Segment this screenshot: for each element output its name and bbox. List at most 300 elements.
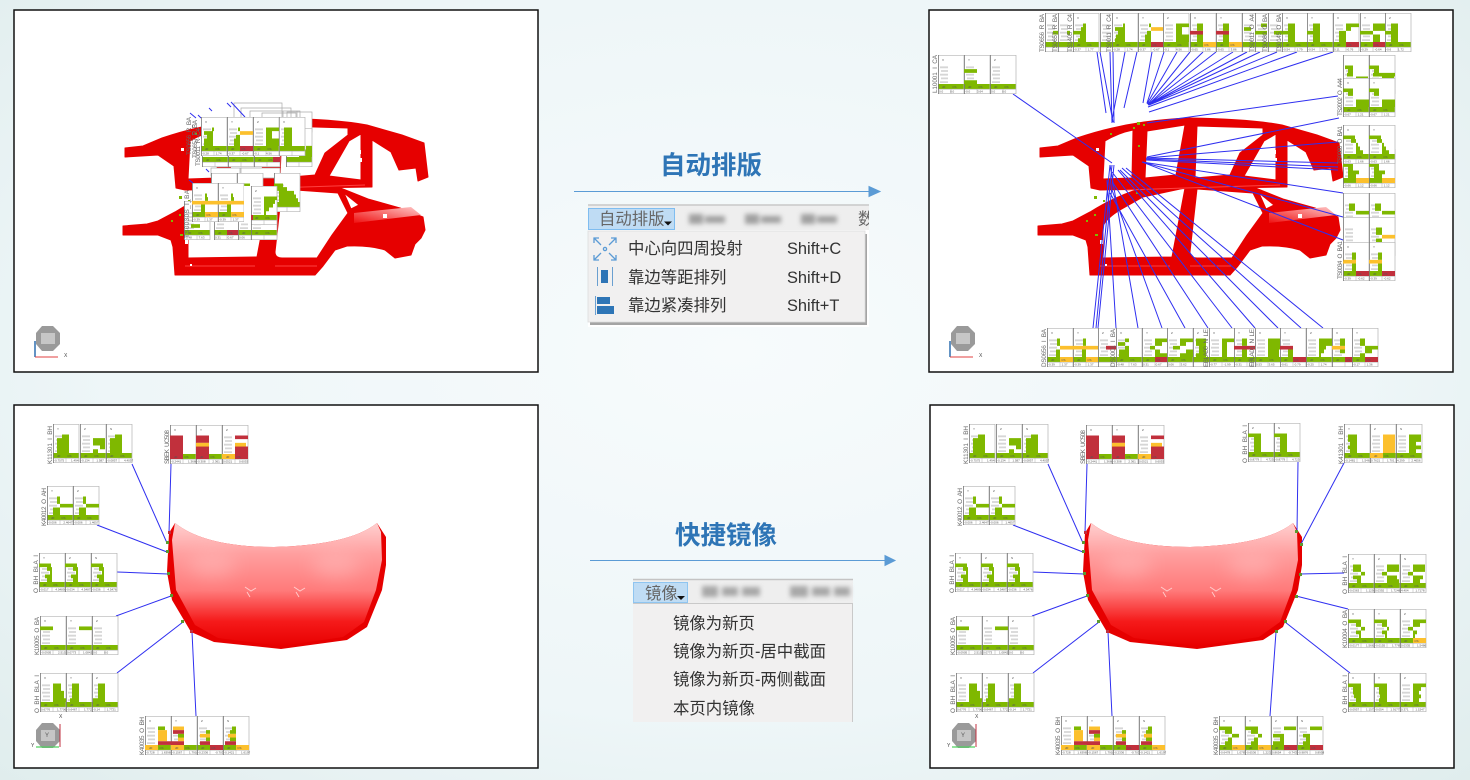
stacked mini charts: before layout lower: dF CS: [188, 231, 203, 235]
stacked mini charts: before layout upper: dF CS: [258, 158, 273, 162]
mini charts: bottom row: DS0656_I_BA: [1041, 328, 1048, 367]
stacked mini charts: before layout upper: dF CS: [231, 147, 246, 151]
mini charts: top row: TS0011_O_A4: [1249, 14, 1256, 52]
stacked mini charts: before layout upper: dF CS: [206, 158, 221, 162]
mini charts: top row: TS0657_R_BA: [1052, 13, 1059, 52]
mini chart: left: [932, 54, 1016, 94]
view cube: after layout: [950, 326, 983, 359]
mini charts: bottom row: -0.25 1.74: [1307, 362, 1327, 366]
mini charts: right column: TS2002_O_A44: [1337, 78, 1344, 116]
mini charts: top row: -0.37 1.77: [1074, 48, 1094, 52]
mini chart: SBEK_UC508: -0.308 2.361: [197, 460, 220, 464]
mini chart: O_BH_BLA_I lower: dF CS: [44, 703, 59, 707]
mini charts: bottom row: Z: [1102, 331, 1104, 335]
mini charts: bottom row: EBLA01_N_LE: [1249, 329, 1256, 367]
stacked mini charts: before layout lower: dF CS: [196, 213, 211, 217]
mini chart: SBEK_UC508: Z: [226, 428, 228, 432]
mini chart: O_BH_BLA_I right top: dF CS: [1252, 453, 1267, 457]
mini charts: top row: X: [1077, 16, 1079, 20]
mini chart: left: Z: [994, 58, 996, 62]
mini chart: K41301_I_BH right: [1338, 424, 1422, 464]
mini chart: K40035_O_BH: -0.2336 -0.7036: [198, 750, 226, 754]
mini chart: O_BH_BLA_I right top: N: [1278, 426, 1280, 430]
mini chart: K40035_O_BH right: [1213, 716, 1325, 755]
mini chart: K10004_O_BA right: Y: [1378, 612, 1380, 616]
menu: quick mirror: [633, 579, 853, 722]
mini chart: K40035_O_BH right: K40035_O_BH: [1213, 717, 1220, 755]
mini chart: O_BH_BLA_I lower: 0.6776 1.7706: [41, 708, 67, 712]
stacked mini charts: before layout upper: dF CS: [257, 147, 272, 151]
mini charts: bottom row: Y: [1284, 331, 1286, 335]
mini charts: top row: -0.54 1.79: [1283, 48, 1303, 52]
mini chart: O_BH_BLA_I upper: -0.034 4.5487: [66, 588, 91, 592]
mini chart: K41301_I_BH right: Z: [1374, 427, 1376, 431]
mini charts: bottom row: -0.17 1.36: [1353, 362, 1373, 366]
stacked mini charts: before layout lower: dF CS: [255, 216, 270, 220]
mini chart: O_BH_BLA_I right middle: O_BH_BLA_I: [1342, 556, 1349, 594]
mini chart: O_BH_BLA_I upper: Z: [69, 556, 71, 560]
mini chart: K41301_I_BH right: dF CS: [1374, 454, 1389, 458]
mini chart: O_BH_BLA_I right middle: dF CS: [1378, 584, 1393, 588]
mini chart: K41301_I_BH right: N: [1400, 427, 1402, 431]
mini charts: bottom row: -0.39 1.37: [1074, 362, 1094, 366]
mini charts: top row: dF CS: [1142, 43, 1157, 47]
mini charts: top row: dF CS: [1167, 43, 1182, 47]
mini chart: O_BH_BLA_I right bottom: -0.0957 1.1571: [1349, 708, 1376, 712]
mini chart: O_BH_BLA_I lower: dF CS: [70, 703, 85, 707]
stacked mini charts: before layout lower: dF CS: [242, 231, 257, 235]
mini charts: bottom row: dF CS: [1259, 358, 1274, 362]
toolbar button: quick mirror: 镜像: [645, 584, 678, 603]
mini charts: bottom row: X: [1213, 331, 1215, 335]
mini charts: top row: X: [1337, 16, 1339, 20]
mini charts: bottom row: X: [1336, 331, 1338, 335]
mini charts: top row: Y: [1142, 16, 1144, 20]
menu item: 靠边紧凑排列: [628, 297, 839, 315]
mini chart: K40012_O_AH: Y: [51, 489, 53, 493]
mini chart: K11301_I_BH: K11301_I_BH: [47, 426, 54, 464]
mini chart: O_BH_BLA_I upper: -0.036 4.5476: [92, 588, 117, 592]
view cube: mirror before: X: [59, 714, 63, 720]
stacked mini charts: before layout lower: X: [196, 186, 198, 190]
mini chart: O_BH_BLA_I lower: [34, 673, 118, 713]
blurred toolbar items: [702, 586, 850, 597]
mini charts: right column: -0.39 -0.62: [1370, 276, 1391, 280]
mini chart: O_BH_BLA_I right top: [1242, 423, 1300, 463]
leader lines: after layout: [1013, 52, 1343, 328]
mini chart: O_BH_BLA_I right middle: Z: [1378, 557, 1380, 561]
toolbar button: auto layout: 自动排版: [599, 210, 665, 228]
mini chart: K10005_O_BA: dF CS: [44, 646, 59, 650]
mini chart: O_BH_BLA_I upper: O_BH_BLA_I: [33, 555, 40, 593]
mini charts: bottom row: X: [1120, 331, 1122, 335]
mini chart: K40035_O_BH: dF CS: [201, 746, 216, 750]
mini charts: top row: Y: [1311, 16, 1313, 20]
mini chart: K40012_O_AH: dF CS: [51, 516, 66, 520]
mini charts: top row: -0.65 3.86: [1191, 48, 1211, 52]
mini charts: right column: X: [1347, 81, 1349, 85]
mini charts: right column: Y: [1373, 81, 1375, 85]
stacked mini charts: before layout upper: X: [205, 120, 207, 124]
mini charts: top row: TS0656_R_BA: [1039, 13, 1046, 52]
mini chart: K10005_O_BA: dF CS: [96, 646, 111, 650]
mini chart: O_BH_BLA_I right bottom: 0.371 1.1547: [1401, 708, 1425, 712]
mini charts: top row: dF CS: [1194, 43, 1209, 47]
mini chart: K11301_I_BH: dF CS: [57, 454, 72, 458]
mini charts: bottom row: dF CS: [1146, 358, 1161, 362]
mini chart: SBEK_UC508: Y: [200, 428, 202, 432]
mini chart: K10004_O_BA right: dF CS: [1352, 639, 1367, 643]
mini charts: right column: -0.63 1.66: [1370, 160, 1390, 164]
mini charts: bottom row: X: [1259, 331, 1261, 335]
mini chart: left: 0.0 0.0: [939, 90, 955, 94]
mini charts: top row: Z: [1167, 16, 1169, 20]
stacked mini charts: before layout lower: [184, 168, 300, 240]
stacked mini charts: before layout upper: TS0656_R_BA: [186, 116, 193, 155]
stacked mini charts: before layout lower: dF CS: [218, 231, 233, 235]
mini chart: O_BH_BLA_I right top: -0.8779 4.725: [1249, 458, 1274, 462]
mini charts: bottom row: 0.31 0.67: [1143, 362, 1162, 366]
mini charts: bottom row: -0.31 1.2: [1235, 362, 1253, 366]
mini charts: bottom row: dF CS: [1120, 358, 1135, 362]
stacked mini charts: before layout upper: TS0657_R_BA: [192, 119, 199, 158]
mini chart: O_BH_BLA_I right top: Z: [1252, 426, 1254, 430]
mini chart: O_BH_BLA_I lower: Y: [70, 676, 72, 680]
mini chart: O_BH_BLA_I lower: O_BH_BLA_I: [34, 675, 41, 713]
mirrored left charts: mirror after: [949, 424, 1167, 755]
mini charts: bottom row: dF CS: [1077, 358, 1092, 362]
mini charts: bottom row: dF CS: [1171, 358, 1186, 362]
mini charts: top row: -0.37 -0.67: [1139, 48, 1160, 52]
mini chart: O_BH_BLA_I upper: Y: [43, 556, 45, 560]
mini chart: K40035_O_BH right: dF CS: [1301, 746, 1316, 750]
mini charts: top row: 0.11 -0.76: [1334, 48, 1354, 52]
mini charts: right column: -0.66 1.12: [1370, 184, 1390, 188]
mini charts: bottom row: DS0001_I_BA: [1110, 328, 1117, 367]
mini chart: O_BH_BLA_I right middle: N: [1404, 557, 1406, 561]
stacked mini charts: before layout lower: dF CS: [222, 213, 237, 217]
mini chart: SBEK_UC508: SBEK_UC508: [164, 430, 171, 464]
mini charts: bottom row: Y: [1146, 331, 1148, 335]
mini charts: right column: X: [1347, 245, 1349, 249]
mini chart: K10004_O_BA right: -0.0177 1.5662: [1349, 644, 1376, 648]
mini chart: K40012_O_AH: K40012_O_AH: [41, 488, 48, 526]
mini chart: K40035_O_BH: dF CS: [175, 746, 190, 750]
mini charts: bottom row: dF CS: [1213, 358, 1228, 362]
mini charts: top row: -0.1 4.56: [1164, 48, 1182, 52]
mini chart: K40035_O_BH right: dF CS: [1275, 746, 1290, 750]
mini chart: K40035_O_BH right: dF CS: [1249, 746, 1264, 750]
menu item: 中心向四周投射: Shift+C: [787, 240, 841, 258]
mini chart: K11301_I_BH: dF CS: [84, 454, 99, 458]
mini charts: bottom row: dF CS: [1051, 358, 1066, 362]
mini charts: top row: [1039, 13, 1411, 52]
panel: auto layout before: [14, 10, 538, 372]
car body: after layout: [1038, 118, 1343, 275]
mini chart: O_BH_BLA_I right bottom: dF CS: [1352, 703, 1367, 707]
mini charts: top row: dF CS: [1077, 43, 1092, 47]
mini chart: K41301_I_BH right: 4.299 2.4656: [1397, 458, 1421, 462]
mini charts: bottom row: [1041, 328, 1378, 367]
blurred toolbar items: [689, 214, 837, 224]
mini chart: K11301_I_BH: N: [110, 427, 112, 431]
mini chart: K40035_O_BH: Z: [201, 719, 203, 723]
mini charts: bottom row: 0.06 3.62: [1168, 362, 1187, 366]
mini chart: K11301_I_BH: -0.134 1.587: [81, 458, 104, 462]
mini charts: bottom row: X: [1051, 331, 1053, 335]
mini chart: O_BH_BLA_I right bottom: Y: [1378, 676, 1380, 680]
mini chart: K10005_O_BA: -0.0905 2.5151: [41, 650, 68, 654]
mini chart: K11301_I_BH: -0.0857 4.4057: [107, 458, 134, 462]
mini chart: O_BH_BLA_I right bottom: dF CS: [1378, 703, 1393, 707]
icon: center projection: [594, 238, 616, 260]
mini chart: O_BH_BLA_I upper: -0.017 4.0489: [40, 588, 65, 592]
mini chart: K10005_O_BA: 0.0 0.0: [93, 650, 109, 654]
mini charts: right column: dF CS: [1347, 272, 1362, 276]
mini charts: bottom row: Y: [1356, 331, 1358, 335]
mini charts: right column: TS0080_O_BA1: [1337, 126, 1344, 164]
view cube: mirror after: X: [975, 714, 979, 720]
mini chart: K10005_O_BA: [34, 616, 118, 655]
menu item: 靠边等距排列: 靠边等距排列: [628, 269, 726, 287]
hood: mirror after: [1083, 523, 1302, 649]
mini charts: top row: TS0145_O_BA: [1276, 13, 1283, 52]
mini charts: right column: TS0034_O_BA1: [1337, 241, 1344, 279]
mini chart: SBEK_UC508: dF CS: [226, 455, 241, 459]
mini chart: left: X: [942, 58, 944, 62]
mini charts: top row: TS0080_O_BA: [1262, 13, 1269, 52]
mini charts: bottom row: EBLA00_N_LE: [1203, 329, 1210, 367]
mini chart: K40035_O_BH right: -0.6536 1.2232: [1246, 750, 1273, 754]
view cube: mirror after: [947, 714, 979, 749]
arrow: quick mirror: [590, 556, 895, 566]
stacked mini charts: before layout lower: -0.48 7.63: [185, 236, 205, 240]
stacked mini charts: before layout upper: Y: [231, 120, 233, 124]
mini chart: K40035_O_BH right: 0.8654 -0.7437: [1272, 750, 1299, 754]
menu item: 靠边等距排列: Shift+D: [787, 269, 841, 287]
mini chart: K10004_O_BA right: K10004_O_BA: [1342, 609, 1349, 648]
view cube: before layout: [35, 326, 68, 359]
mini chart: K10005_O_BA: X: [44, 619, 46, 623]
mini charts: bottom row: Y: [1077, 331, 1079, 335]
mini chart: O_BH_BLA_I right middle: Y: [1352, 557, 1354, 561]
mini chart: left: 0.0 0.0: [991, 90, 1007, 94]
mini chart: O_BH_BLA_I upper: dF CS: [95, 583, 110, 587]
menu item: 靠边紧凑排列: Shift+T: [787, 297, 839, 315]
mini charts: bottom row: Z: [1310, 331, 1312, 335]
mini charts: top row: -0.54 1.79: [1308, 48, 1328, 52]
leader lines and mini charts: mirror before: [33, 424, 251, 755]
mini chart: O_BH_BLA_I lower: Z: [96, 676, 98, 680]
toolbar button: quick mirror: [634, 582, 688, 603]
arrow: auto layout: [574, 186, 880, 196]
mini chart: O_BH_BLA_I right bottom: X: [1352, 676, 1354, 680]
mini charts: bottom row: dF CS: [1336, 358, 1351, 362]
mini chart: SBEK_UC508: X: [174, 428, 176, 432]
mini chart: O_BH_BLA_I right bottom: dF CS: [1404, 703, 1419, 707]
mini chart: O_BH_BLA_I right top: dF CS: [1278, 453, 1293, 457]
mini charts: bottom row: dF CS: [1356, 358, 1371, 362]
mini chart: O_BH_BLA_I upper: dF CS: [69, 583, 84, 587]
mini chart: O_BH_BLA_I right bottom: Z: [1404, 676, 1406, 680]
view cube: mirror after: Y: [961, 733, 965, 739]
mini charts: top row: X: [1286, 16, 1288, 20]
mini chart: O_BH_BLA_I right middle: dF CS: [1352, 584, 1367, 588]
mini charts: top row: Y: [1364, 16, 1366, 20]
mini charts: top row: Y: [1220, 16, 1222, 20]
menu item: 本页内镜像: 本页内镜像: [673, 699, 755, 718]
mini chart: K41301_I_BH right: Y: [1348, 427, 1350, 431]
mini charts: top row: X: [1194, 16, 1196, 20]
stacked mini charts: before layout upper: Z: [257, 120, 259, 124]
mini chart: left: -0.0 3.64: [965, 90, 983, 94]
mini chart: left: dF CS: [994, 85, 1009, 89]
mini chart: K10004_O_BA right: -0.0155 1.7787: [1375, 644, 1402, 648]
mini chart: O_BH_BLA_I upper: dF CS: [43, 583, 58, 587]
mini charts: top row: dF CS: [1337, 43, 1352, 47]
mini charts: right column: X: [1347, 128, 1349, 132]
stacked mini charts: before layout lower: 0.06 3.62: [239, 236, 258, 240]
mini chart: O_BH_BLA_I lower: -0.6467 1.7721: [67, 708, 94, 712]
mini chart: K40035_O_BH: dF CS: [227, 746, 242, 750]
mini charts: right column: dF CS: [1347, 108, 1362, 112]
mini chart: K10005_O_BA: K10005_O_BA: [34, 616, 41, 655]
mini chart: K10004_O_BA right: Z: [1404, 612, 1406, 616]
mini chart: K41301_I_BH right: 0.7621 1.701: [1371, 458, 1395, 462]
mini chart: O_BH_BLA_I right bottom: O_BH_BLA_I: [1342, 675, 1349, 713]
mini chart: K40012_O_AH: [41, 486, 99, 526]
mini chart: K40012_O_AH: -0.006 2.4647: [48, 520, 73, 524]
mini chart: O_BH_BLA_I lower: X: [44, 676, 46, 680]
mini chart: K10004_O_BA right: X: [1352, 612, 1354, 616]
mini chart: K40035_O_BH: X: [149, 719, 151, 723]
mini chart: SBEK_UC508: dF CS: [200, 455, 215, 459]
menu item: 靠边紧凑排列: 靠边紧凑排列: [628, 297, 726, 315]
stacked mini charts: before layout lower: 0.31 0.67: [215, 236, 234, 240]
stacked mini charts: before layout upper: TS0011_R_C4: [195, 128, 202, 166]
mini chart: K41301_I_BH right: K41301_I_BH: [1338, 426, 1345, 464]
mini charts: top row: -0.29 -0.64: [1361, 48, 1382, 52]
mini charts: top row: dF CS: [1286, 43, 1301, 47]
mini chart: K40012_O_AH: -0.006 1.4657: [74, 520, 99, 524]
mini chart: K40035_O_BH: -0.728 1.6398: [146, 750, 171, 754]
stacked mini charts: before layout lower: Z: [255, 189, 257, 193]
mini charts: top row: TS1405_R_C4: [1067, 14, 1074, 52]
mini charts: top row: -0.65 3.86: [1217, 48, 1237, 52]
mini chart: K41301_I_BH right: dF CS: [1348, 454, 1363, 458]
view cube: mirror before: Y: [31, 743, 35, 749]
stacked mini charts: before layout lower: TS0030S_I_BA: [184, 189, 191, 238]
mini charts: right column: [1337, 55, 1395, 281]
mini chart: left: dF CS: [968, 85, 983, 89]
mini charts: bottom row: Z: [1197, 331, 1199, 335]
mini chart: K10005_O_BA: 0.0773 1.0842: [67, 650, 93, 654]
mini chart: K40035_O_BH right: X: [1223, 719, 1225, 723]
mini chart: SBEK_UC508: -0.2441 1.3660: [171, 460, 198, 464]
menu item: 镜像为新页-两侧截面: 镜像为新页-两侧截面: [673, 670, 826, 689]
mini charts: top row: TS0011_R_C4: [1106, 14, 1113, 52]
mini chart: O_BH_BLA_I right bottom: -0.054 1.9177: [1375, 708, 1400, 712]
mini chart: K10005_O_BA: Z: [96, 619, 98, 623]
mini charts: bottom row: -0.48 7.63: [1117, 362, 1137, 366]
mini chart: K40035_O_BH right: -0.9876 0.8958: [1298, 750, 1325, 754]
mini chart: O_BH_BLA_I right top: -0.8779 4.725: [1275, 458, 1300, 462]
mini chart: O_BH_BLA_I right middle: 0.0392 1.7248: [1375, 588, 1401, 592]
hood: mirror before: [167, 523, 386, 649]
view cube: mirror after: Y: [947, 743, 951, 749]
icon: compact spacing: [595, 296, 614, 315]
mini charts: right column: -0.66 1.12: [1344, 184, 1364, 188]
menu item: 镜像为新页: 镜像为新页: [673, 614, 755, 633]
mini chart: O_BH_BLA_I upper: N: [95, 556, 97, 560]
mini charts: right column: -0.67 1.21: [1344, 112, 1364, 116]
mini chart: left: L10001_I_CA: [932, 54, 939, 93]
mini charts: right column: dF CS: [1373, 155, 1388, 159]
mini chart: K11301_I_BH: Y: [57, 427, 59, 431]
mini chart: K10004_O_BA right: 0.0335 1.5486: [1401, 644, 1427, 648]
mini chart: K41301_I_BH right: dF CS: [1400, 454, 1415, 458]
mini charts: top row: -0.6 1.72: [1386, 48, 1404, 52]
stacked mini charts: before layout upper: dF CS: [232, 158, 247, 162]
mini chart: O_BH_BLA_I right middle: 4.404 1.7178: [1401, 588, 1425, 592]
mini chart: K41301_I_BH right: -0.1481 1.546: [1345, 458, 1370, 462]
view cube: after layout: X: [979, 353, 983, 359]
stacked mini charts: before layout upper: dF CS: [205, 147, 220, 151]
mini chart: SBEK_UC508: dF CS: [174, 455, 189, 459]
menu item: 中心向四周投射: 中心向四周投射: [628, 240, 743, 258]
stacked mini charts: before layout lower: Y: [222, 186, 224, 190]
mini chart: K40035_O_BH right: dF CS: [1223, 746, 1238, 750]
toolbar button: auto layout: [588, 208, 674, 230]
mini chart: K11301_I_BH: [47, 424, 134, 464]
mini chart: K10005_O_BA: Y: [70, 619, 72, 623]
mini charts: bottom row: dF CS: [1310, 358, 1325, 362]
mini chart: O_BH_BLA_I lower: -0.14 1.7721: [93, 708, 116, 712]
stacked mini charts: before layout upper: -0.1 4.56: [254, 152, 272, 156]
mini charts: top row: X: [1116, 16, 1118, 20]
stacked mini charts: before layout lower: -0.39 1.37: [219, 218, 239, 222]
mini charts: right column: dF CS: [1347, 155, 1362, 159]
mini chart: K10004_O_BA right: [1342, 609, 1427, 648]
mini charts: right column: Y: [1373, 128, 1375, 132]
mini charts: bottom row: Z: [1171, 331, 1173, 335]
mini chart: K40035_O_BH right: Y: [1249, 719, 1251, 723]
heading: auto layout: 自动排版: [660, 152, 762, 180]
mini chart: K40012_O_AH: Z: [77, 489, 79, 493]
mini charts: bottom row: -0.77 -1.99: [1210, 362, 1231, 366]
stacked mini charts: before layout upper: X: [283, 120, 285, 124]
mini chart: O_BH_BLA_I right middle: [1342, 554, 1426, 594]
mini charts: right column: Y: [1373, 245, 1375, 249]
mini chart: SBEK_UC508: [164, 425, 249, 464]
heading: quick mirror: 快捷镜像: [675, 522, 778, 550]
mini chart: K11301_I_BH: -0.7575 1.494: [54, 458, 79, 462]
mini charts: top row: dF CS: [1220, 43, 1235, 47]
mini charts: top row: dF CS: [1311, 43, 1326, 47]
mini charts: top row: dF CS: [1364, 43, 1379, 47]
mini chart: O_BH_BLA_I upper: [33, 553, 117, 593]
mini chart: K40035_O_BH right: N: [1301, 719, 1303, 723]
mini charts: top row: Z: [1389, 16, 1391, 20]
mini charts: right column: -0.63 1.66: [1344, 160, 1364, 164]
mini chart: K40035_O_BH: -0.1421 1.6197: [224, 750, 251, 754]
mini chart: O_BH_BLA_I right middle: -0.0363 1.129: [1349, 588, 1374, 592]
mini chart: K11301_I_BH: Z: [84, 427, 86, 431]
mini charts: top row: dF CS: [1389, 43, 1404, 47]
mini charts: top row: -0.28 1.74: [1113, 48, 1133, 52]
mini chart: SBEK_UC508: 0.0521 0.6053: [223, 460, 249, 464]
mini chart: O_BH_BLA_I right middle: dF CS: [1404, 584, 1419, 588]
